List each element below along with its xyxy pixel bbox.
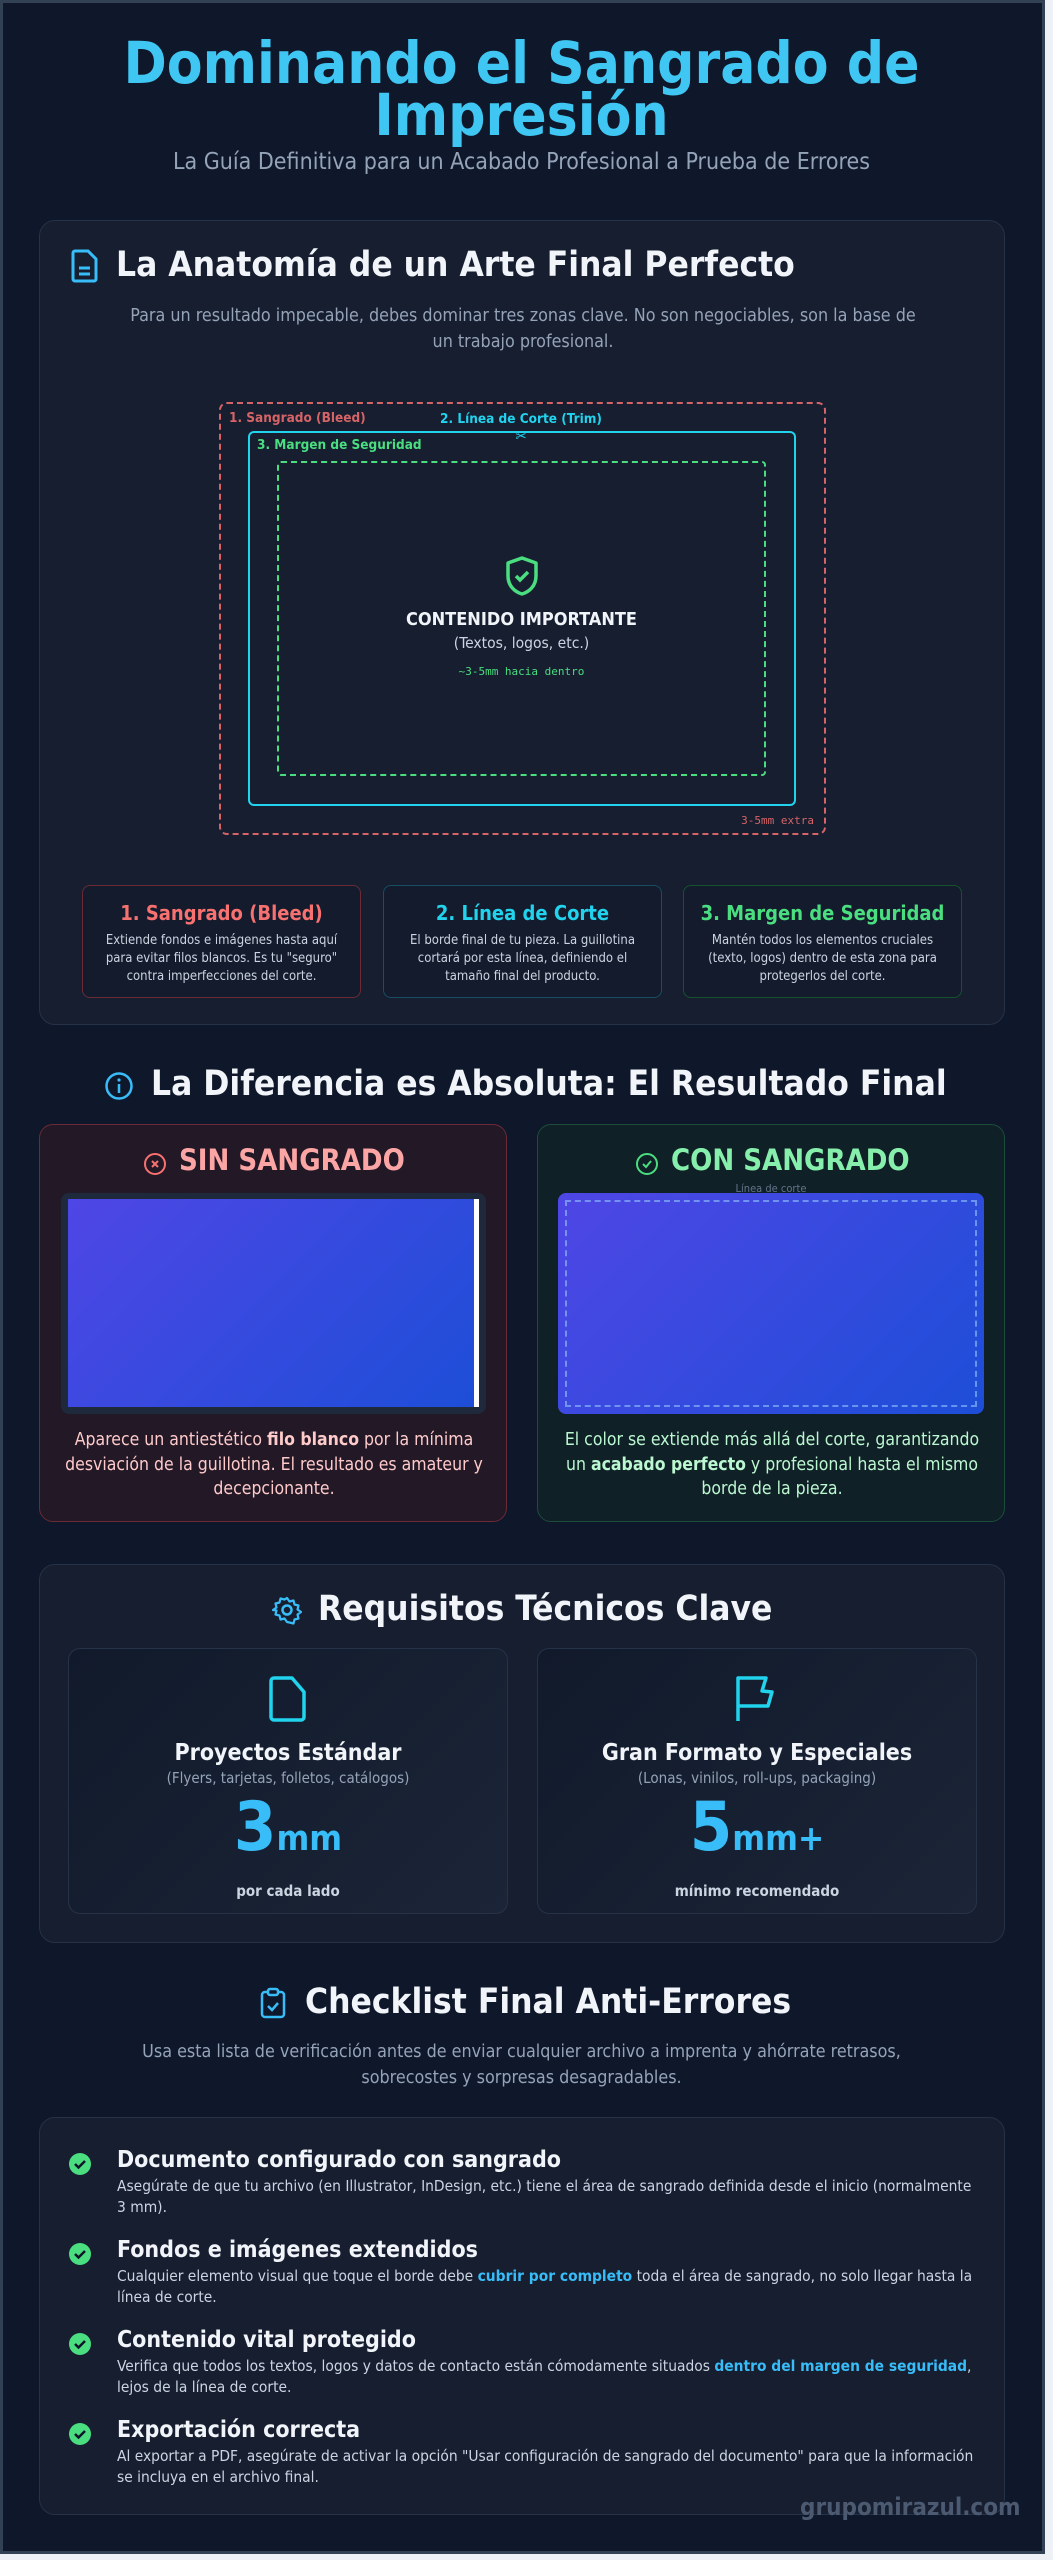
icon: document — [72, 250, 98, 282]
label: safety: 3. Margen de Seguridad — [257, 437, 422, 453]
title: Dominando el Sangrado de — [123, 29, 920, 97]
panel: anatomy — [39, 220, 1005, 1025]
icon: flag — [736, 1676, 774, 1721]
heading: Requisitos Técnicos Clave — [318, 1589, 772, 1629]
label: trim — [440, 411, 602, 445]
checklist intro: Usa esta lista de verificación antes de enviar cualquier archivo a imprenta y ahórrate retrasos, sobrecostes y sorpresas desagradables. — [142, 2041, 901, 2088]
card: corte: El borde final de tu pieza. La guillotina cortará por esta línea, definiendo el tamaño final del producto. — [410, 933, 635, 984]
heading: checklist: Checklist Final Anti-Errores — [305, 1982, 791, 2022]
card: estandar: 3mm — [234, 1788, 342, 1867]
title: SIN SANGRADO — [179, 1143, 405, 1177]
text: Documento configurado con sangrado — [117, 2147, 561, 2173]
item 1 — [69, 2147, 971, 2216]
card: margen — [683, 885, 962, 998]
card: gran formato: Gran Formato y Especiales — [602, 1740, 912, 1766]
text: Cualquier elemento visual que toque el borde debe cubrir por completo toda el área de sangrado, no solo llegar hasta la línea de corte. — [117, 2267, 972, 2306]
icon: shield — [506, 556, 538, 596]
card: gran formato — [537, 1648, 977, 1914]
card: gran formato: mínimo recomendado — [675, 1882, 839, 1900]
safety box — [277, 461, 766, 776]
text: Aparece un antiestético filo blanco por la mínima desviación de la guillotina. El resultado es amateur y decepcionante. — [65, 1430, 483, 1499]
subtitle: La Guía Definitiva para un Acabado Profesional a Prueba de Errores — [173, 149, 870, 175]
footer watermark: grupomirazul.com — [800, 2493, 1021, 2521]
item 2 — [69, 2237, 972, 2306]
item 3 — [69, 2327, 971, 2396]
card: estandar: (Flyers, tarjetas, folletos, catálogos) — [167, 1769, 409, 1787]
title: Impresión — [374, 81, 669, 149]
item 4 — [69, 2417, 973, 2486]
heading: difference: La Diferencia es Absoluta: El Resultado Final — [151, 1064, 947, 1104]
panel: sin sangrado — [39, 1124, 507, 1522]
card: sangrado: Extiende fondos e imágenes hasta aquí para evitar filos blancos. Es tu "seguro" contra imperfecciones del corte. — [106, 933, 337, 984]
card: sangrado: 1. Sangrado (Bleed) — [120, 901, 323, 925]
panel: requisitos — [39, 1564, 1005, 1943]
card: estandar — [68, 1648, 508, 1914]
content block: ~3-5mm hacia dentro — [459, 665, 584, 678]
content block — [406, 556, 637, 678]
label: trim: ✂ — [515, 427, 527, 445]
label: linea de corte: Línea de corte — [736, 1182, 806, 1195]
title — [123, 29, 920, 149]
heading: La Anatomía de un Arte Final Perfecto — [116, 245, 795, 285]
card: gran formato: (Lonas, vinilos, roll-ups, packaging) — [638, 1769, 876, 1787]
card: estandar: por cada lado — [236, 1882, 340, 1900]
text: El color se extiende más allá del corte, garantizando un acabado perfecto y profesional hasta el mismo borde de la pieza. — [565, 1430, 979, 1499]
card: corte: 2. Línea de Corte — [436, 901, 609, 925]
text: Exportación correcta — [117, 2417, 360, 2443]
icon: file — [269, 1676, 306, 1722]
mockup: full bleed — [558, 1193, 984, 1414]
card: corte — [383, 885, 662, 998]
card: estandar: Proyectos Estándar — [174, 1740, 402, 1766]
trim box — [248, 431, 796, 806]
text: Asegúrate de que tu archivo (en Illustrator, InDesign, etc.) tiene el área de sangrado definida desde el inicio (normalmente 3 mm). — [117, 2177, 971, 2216]
label: trim: 2. Línea de Corte (Trim) — [440, 411, 602, 427]
content block: (Textos, logos, etc.) — [454, 634, 589, 652]
text: Al exportar a PDF, asegúrate de activar la opción "Usar configuración de sangrado del documento" para que la información se incluya en el archivo final. — [117, 2447, 973, 2486]
text: Fondos e imágenes extendidos — [117, 2237, 478, 2263]
text: Contenido vital protegido — [117, 2327, 416, 2353]
label: extra: 3-5mm extra — [741, 814, 814, 827]
card: margen: Mantén todos los elementos cruciales (texto, logos) dentro de esta zona para protegerlos del corte. — [708, 933, 937, 984]
card: sangrado — [82, 885, 361, 998]
card: margen: 3. Margen de Seguridad — [701, 901, 944, 925]
mockup: white edge — [61, 1193, 486, 1414]
panel: con sangrado — [537, 1124, 1005, 1522]
title: CON SANGRADO — [671, 1143, 910, 1177]
label: bleed: 1. Sangrado (Bleed) — [229, 410, 366, 426]
intro text: Para un resultado impecable, debes dominar tres zonas clave. No son negociables, son la base de un trabajo profesional. — [130, 305, 916, 352]
card: gran formato: 5mm+ — [690, 1788, 824, 1867]
panel: checklist — [39, 2117, 1005, 2515]
diagram: bleed zones — [219, 402, 826, 835]
content block: CONTENIDO IMPORTANTE — [406, 609, 637, 630]
text: Verifica que todos los textos, logos y datos de contacto están cómodamente situados dentro del margen de seguridad, lejos de la línea de corte. — [117, 2357, 971, 2396]
